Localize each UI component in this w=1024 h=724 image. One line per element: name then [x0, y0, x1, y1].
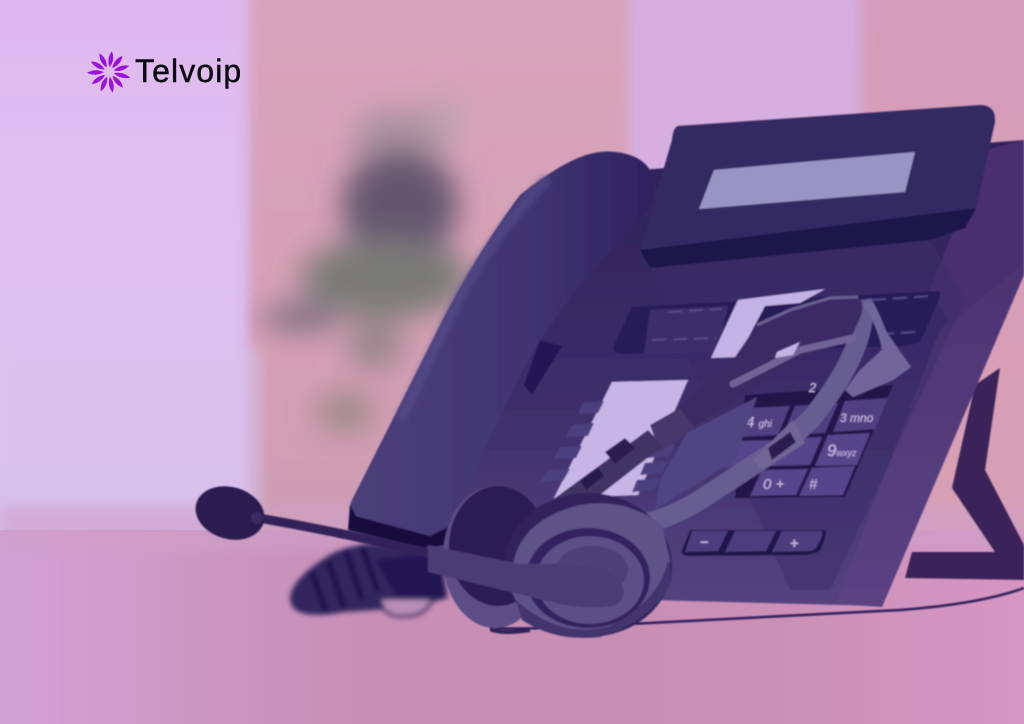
volume keys: + [790, 535, 799, 552]
keypad [724, 380, 893, 498]
paper label card [554, 380, 688, 498]
small side keys [540, 401, 675, 492]
blurred plant [262, 93, 470, 432]
headset [189, 297, 911, 638]
keypad: 2 [808, 380, 817, 395]
grey panel behind headband [655, 397, 757, 510]
display panel [639, 105, 995, 268]
coiled cord [290, 544, 448, 616]
microphone boom [258, 518, 624, 608]
far ear cup [443, 486, 547, 628]
keypad: # [809, 476, 818, 493]
microphone foam [189, 478, 271, 548]
cable [492, 588, 1024, 632]
keypad: 9wxyz [827, 441, 857, 460]
keypad: 0 + [763, 476, 785, 493]
keypad: 3 mno [840, 411, 874, 425]
wordmark: Telvoip [135, 53, 242, 89]
keypad: 4 ghi [746, 414, 773, 431]
display screen [699, 152, 915, 209]
phone stand [905, 368, 1024, 580]
handset [348, 152, 654, 548]
near ear cup [504, 493, 672, 638]
volume keys: − [700, 534, 709, 551]
logo [87, 51, 242, 92]
volume keys [682, 530, 826, 556]
phone body [430, 140, 1024, 607]
function key strip [613, 289, 940, 358]
icon: purple burst [87, 51, 130, 92]
headband [555, 297, 911, 530]
